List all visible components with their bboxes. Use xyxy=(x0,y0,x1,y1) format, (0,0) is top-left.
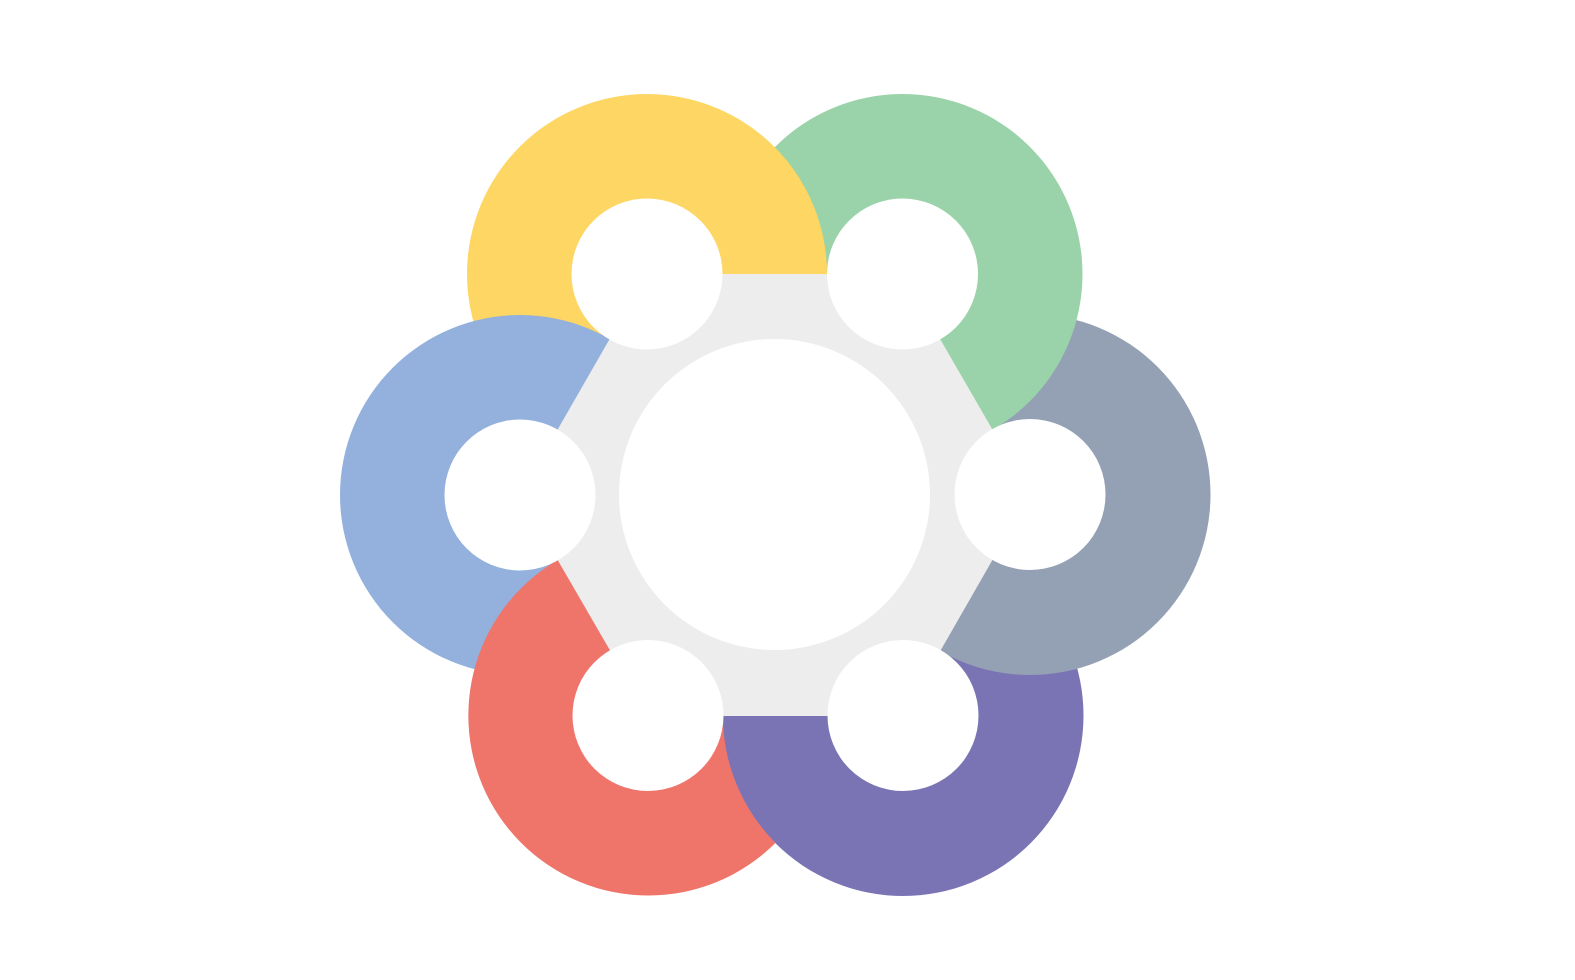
central hexagon xyxy=(520,274,1030,716)
center white circle xyxy=(619,339,930,650)
petal: slate grey xyxy=(850,314,1210,675)
node: grey petal white circle xyxy=(954,419,1106,570)
petal: green xyxy=(722,94,1082,454)
petal: purple xyxy=(722,535,1084,896)
node: yellow petal white circle xyxy=(572,198,722,350)
node: purple petal white circle xyxy=(828,640,978,791)
node: red petal white circle xyxy=(572,640,724,791)
petal: red xyxy=(468,536,776,895)
petal: yellow xyxy=(467,94,827,454)
node: blue petal white circle xyxy=(444,420,596,570)
petal: blue xyxy=(340,315,700,675)
node: green petal white circle xyxy=(827,198,978,350)
